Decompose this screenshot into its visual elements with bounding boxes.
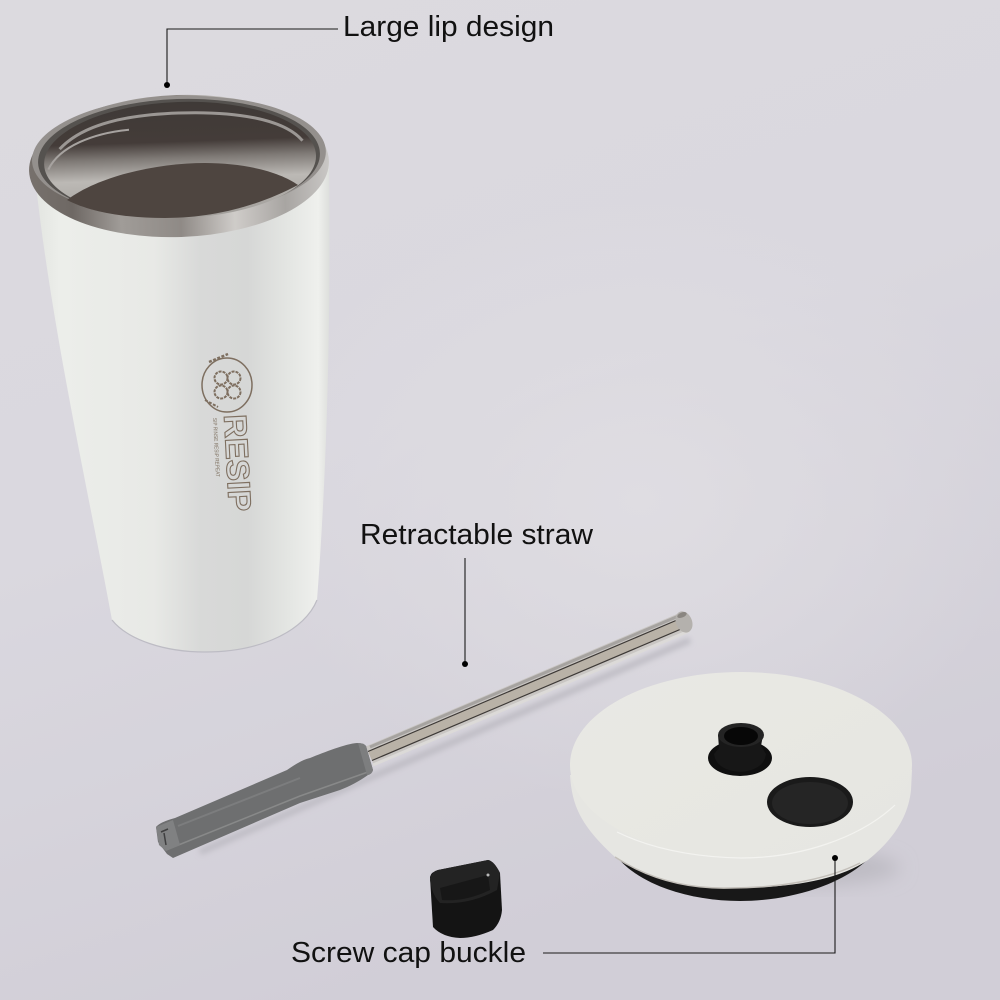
lid — [570, 672, 912, 901]
callout: screw cap buckle: Screw cap buckle — [291, 937, 526, 969]
brand logo on cup: RESIP — [217, 413, 258, 512]
lid rim — [570, 770, 912, 888]
tumbler cup — [27, 90, 331, 652]
cup floor — [67, 163, 298, 218]
lid shadow — [700, 850, 900, 886]
callout: retractable straw: Retractable straw — [360, 519, 593, 551]
steel rim — [27, 90, 331, 242]
lid top — [570, 672, 912, 858]
cup body — [36, 160, 330, 652]
callout: large lip design: Large lip design — [343, 11, 554, 43]
spout — [708, 723, 772, 776]
callout: retractable straw — [360, 519, 593, 667]
sip hole — [767, 777, 853, 827]
brand logo on cup: SIP RINSE RESIP REPEAT — [211, 418, 220, 478]
screw cap buckle — [430, 860, 502, 938]
steel tube — [368, 609, 696, 765]
straw shadow — [200, 640, 690, 852]
callout: large lip design — [164, 11, 554, 88]
straw tip — [156, 820, 180, 851]
brand logo on cup — [202, 354, 258, 512]
grey silicone grip — [156, 743, 373, 858]
gasket — [617, 850, 866, 901]
cup interior — [30, 91, 328, 223]
callout: screw cap buckle — [291, 855, 838, 969]
straw — [156, 609, 696, 858]
